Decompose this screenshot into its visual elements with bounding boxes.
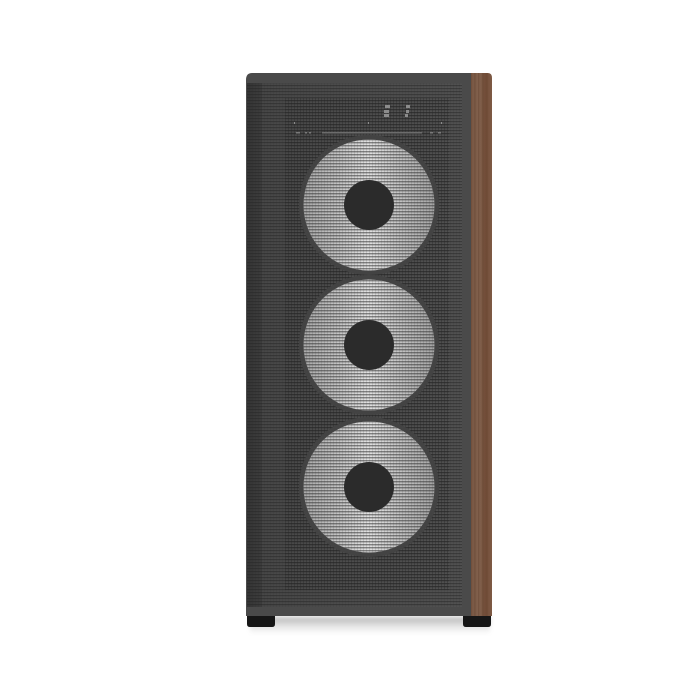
case front frame	[246, 73, 471, 616]
wood side panel	[470, 73, 492, 616]
fan 2	[299, 275, 439, 415]
top dot details	[294, 105, 442, 134]
right foot	[463, 615, 491, 627]
fan 1	[299, 135, 439, 275]
front panel mesh area	[247, 83, 462, 607]
inner darker mesh field	[285, 98, 449, 590]
floor shadow	[250, 617, 490, 634]
left foot	[247, 615, 275, 627]
fan 3	[299, 417, 439, 557]
